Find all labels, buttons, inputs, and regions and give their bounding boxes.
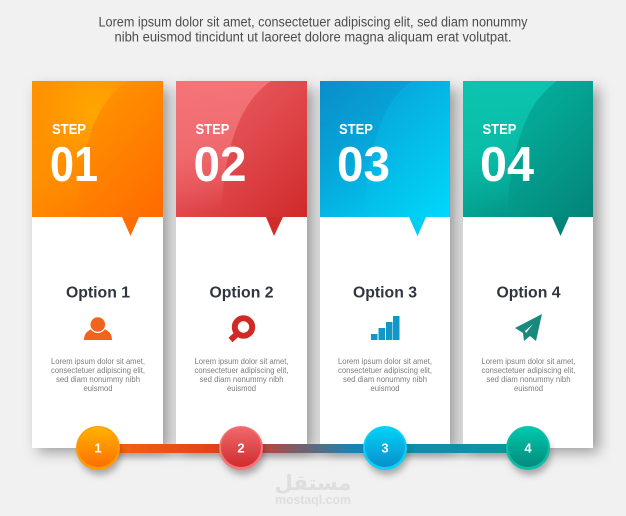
marker 2: 2	[237, 440, 245, 456]
step 3 description: consectetuer adipiscing elit,	[338, 366, 432, 375]
marker 3: 3	[381, 440, 389, 456]
step 4 label: STEP	[482, 121, 516, 138]
step 4 description: Lorem ipsum dolor sit amet,	[482, 357, 576, 366]
step 2 description: sed diam nonummy nibh	[200, 375, 284, 384]
step 1 description: Lorem ipsum dolor sit amet,	[51, 357, 145, 366]
step 2 gloss	[176, 81, 271, 197]
step 1 header	[32, 81, 163, 217]
step 4 description: sed diam nonummy nibh	[486, 375, 570, 384]
step 3 title: Option 3	[353, 284, 417, 302]
marker 3	[363, 426, 408, 475]
step 2 description: consectetuer adipiscing elit,	[194, 366, 288, 375]
step 2 pointer	[266, 217, 283, 236]
step 1 gloss	[56, 81, 122, 160]
step 4 description: euismod	[514, 384, 543, 393]
step 1 description: euismod	[84, 384, 112, 393]
marker 4: 4	[524, 440, 532, 456]
marker 2	[219, 426, 264, 475]
panel: step 2	[176, 81, 307, 448]
step 3 description: sed diam nonummy nibh	[343, 375, 427, 384]
step 1 description: sed diam nonummy nibh	[56, 375, 140, 384]
step 3 header	[320, 81, 450, 217]
step 3 pointer	[409, 217, 426, 236]
step 2 description: Lorem ipsum dolor sit amet,	[194, 357, 288, 366]
step 2 description	[194, 357, 288, 393]
icon: person	[84, 316, 112, 340]
marker 4	[506, 426, 551, 475]
step 2 label: STEP	[196, 121, 230, 138]
step 1 label: STEP	[52, 121, 86, 138]
step 1 description: consectetuer adipiscing elit,	[51, 366, 145, 375]
panel: step 3	[320, 81, 450, 448]
step 4 header	[463, 81, 593, 217]
step 4 description: consectetuer adipiscing elit,	[482, 366, 576, 375]
step 2 title: Option 2	[210, 284, 274, 302]
intro text	[98, 14, 528, 44]
step 1 description	[51, 357, 145, 393]
step 2 description: euismod	[227, 384, 256, 393]
step 2 header	[176, 81, 307, 217]
watermark: mostaql.com	[275, 493, 351, 507]
step 4 gloss	[463, 81, 557, 194]
step 4 title: Option 4	[496, 284, 561, 302]
timeline connector	[98, 444, 530, 457]
intro text: nibh euismod tincidunt ut laoreet dolore magna aliquam erat volutpat.	[114, 30, 512, 44]
step 3 description: Lorem ipsum dolor sit amet,	[338, 357, 432, 366]
panel: step 1	[32, 81, 163, 448]
marker 1	[76, 426, 121, 475]
panel: step 4	[463, 81, 593, 448]
step 3 label: STEP	[339, 121, 373, 138]
step 1 number: 01	[50, 138, 98, 192]
watermark: مستقل	[275, 471, 351, 495]
step 2 number: 02	[194, 138, 246, 192]
step 4 pointer	[552, 217, 569, 236]
watermark	[275, 471, 351, 507]
step 1 title: Option 1	[66, 284, 130, 302]
step 3 description: euismod	[370, 384, 400, 393]
step 4 description	[482, 357, 576, 393]
step 3 number: 03	[337, 138, 390, 192]
icon: bar chart	[371, 316, 400, 340]
step 1 pointer	[122, 217, 139, 236]
icon: paper plane	[515, 314, 542, 341]
step 3 gloss	[338, 81, 412, 164]
icon: magnifier	[230, 318, 252, 340]
step 3 description	[338, 357, 432, 393]
intro text: Lorem ipsum dolor sit amet, consectetuer adipiscing elit, sed diam nonummy	[98, 14, 528, 30]
card shadows	[38, 88, 599, 452]
marker 1: 1	[94, 440, 102, 456]
step 4 number: 04	[480, 138, 534, 192]
